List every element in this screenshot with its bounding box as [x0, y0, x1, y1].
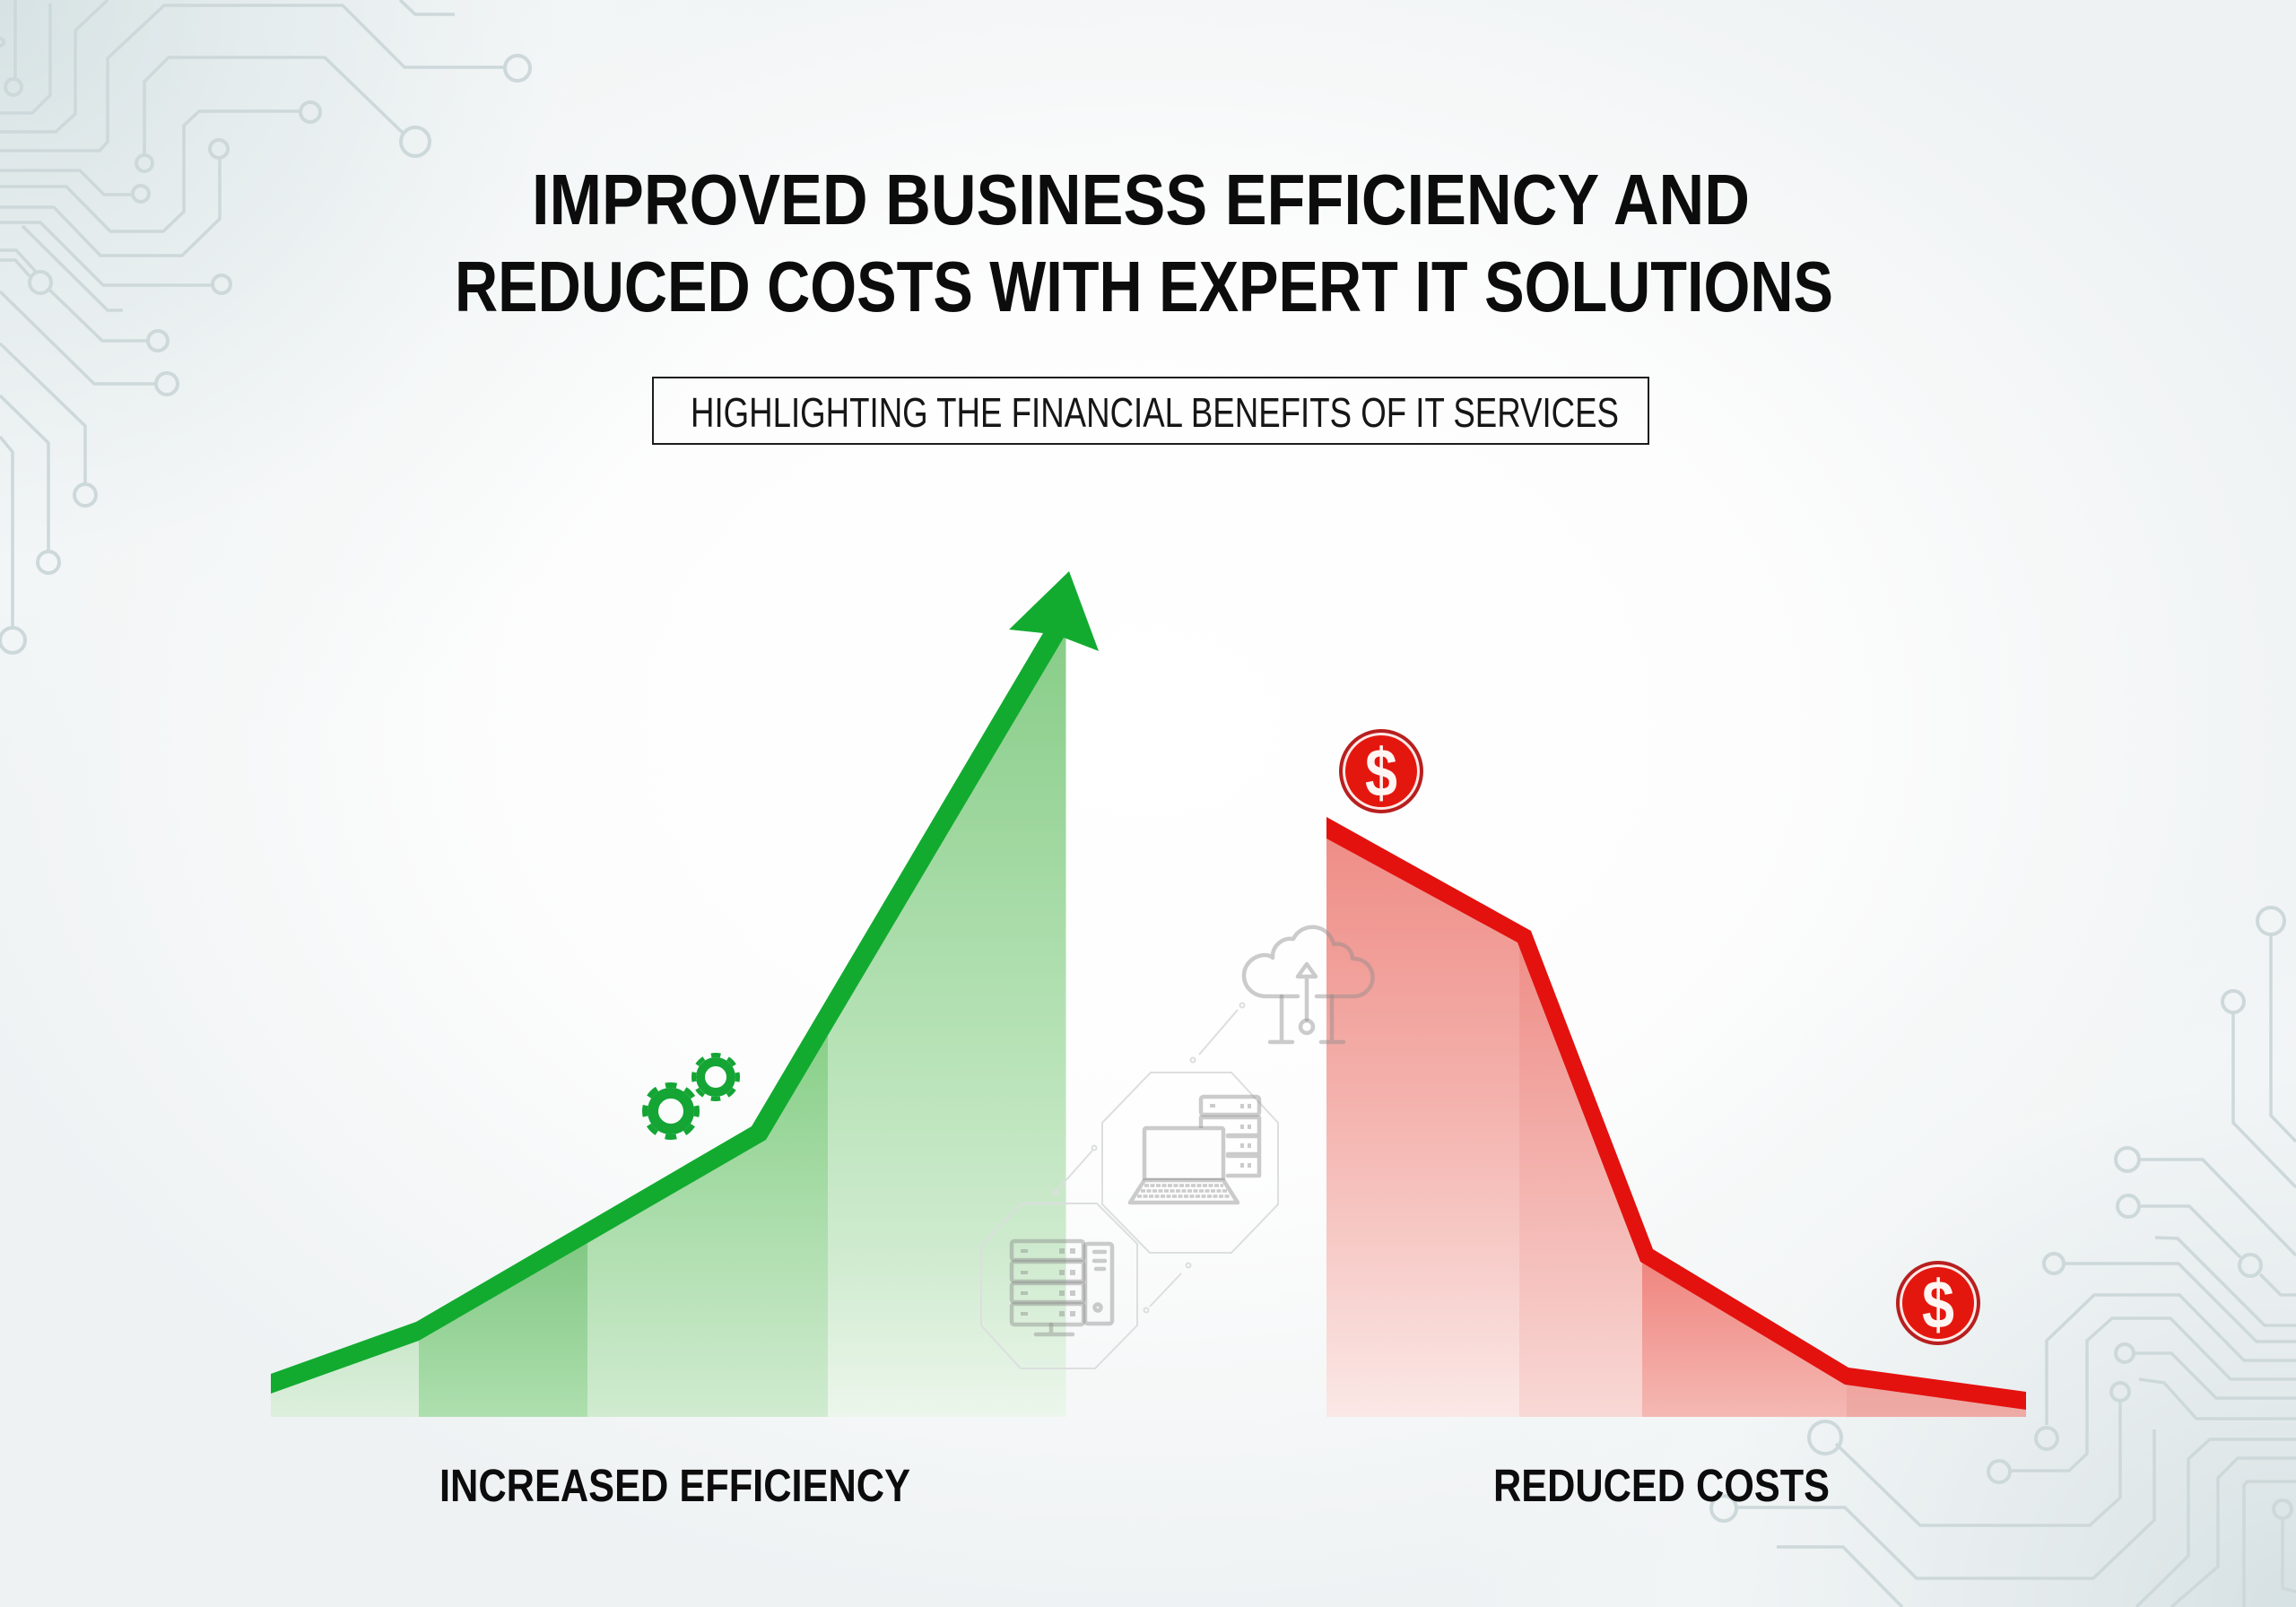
subtitle box — [653, 378, 1648, 444]
label: increased efficiency: INCREASED EFFICIENCY — [439, 1460, 910, 1511]
icon: dollar coin bottom — [1896, 1261, 1980, 1345]
title: IMPROVED BUSINESS EFFICIENCY AND — [532, 160, 1750, 239]
connector: server to laptop — [1144, 1263, 1191, 1313]
connector: laptop to server — [1053, 1146, 1096, 1194]
icon: laptop and server rack — [1102, 1073, 1278, 1253]
title: REDUCED COSTS WITH EXPERT IT SOLUTIONS — [455, 247, 1833, 326]
chart: increased efficiency area segments — [271, 632, 1065, 1417]
chart: reduced costs area segments — [1326, 828, 2026, 1417]
title — [455, 160, 1833, 326]
circuit pattern: top-left corner — [0, 0, 530, 653]
icon: dollar coin top: $ — [1365, 735, 1397, 812]
circuit pattern: bottom-right corner — [1711, 908, 2296, 1607]
icon: gears — [645, 1055, 737, 1137]
green growth arrow line — [271, 571, 1099, 1394]
label: reduced costs: REDUCED COSTS — [1493, 1460, 1830, 1511]
subtitle box: HIGHLIGHTING THE FINANCIAL BENEFITS OF IT SERVICES — [691, 389, 1619, 436]
icon: cloud upload — [1244, 927, 1373, 1042]
icon: dollar coin top — [1339, 729, 1423, 813]
red decline line — [1326, 817, 2026, 1410]
icon: dollar coin bottom: $ — [1922, 1267, 1954, 1343]
icon: server tower — [981, 1203, 1137, 1368]
icon group: IT infrastructure network — [981, 927, 1373, 1368]
connector: cloud to laptop — [1191, 1003, 1245, 1062]
